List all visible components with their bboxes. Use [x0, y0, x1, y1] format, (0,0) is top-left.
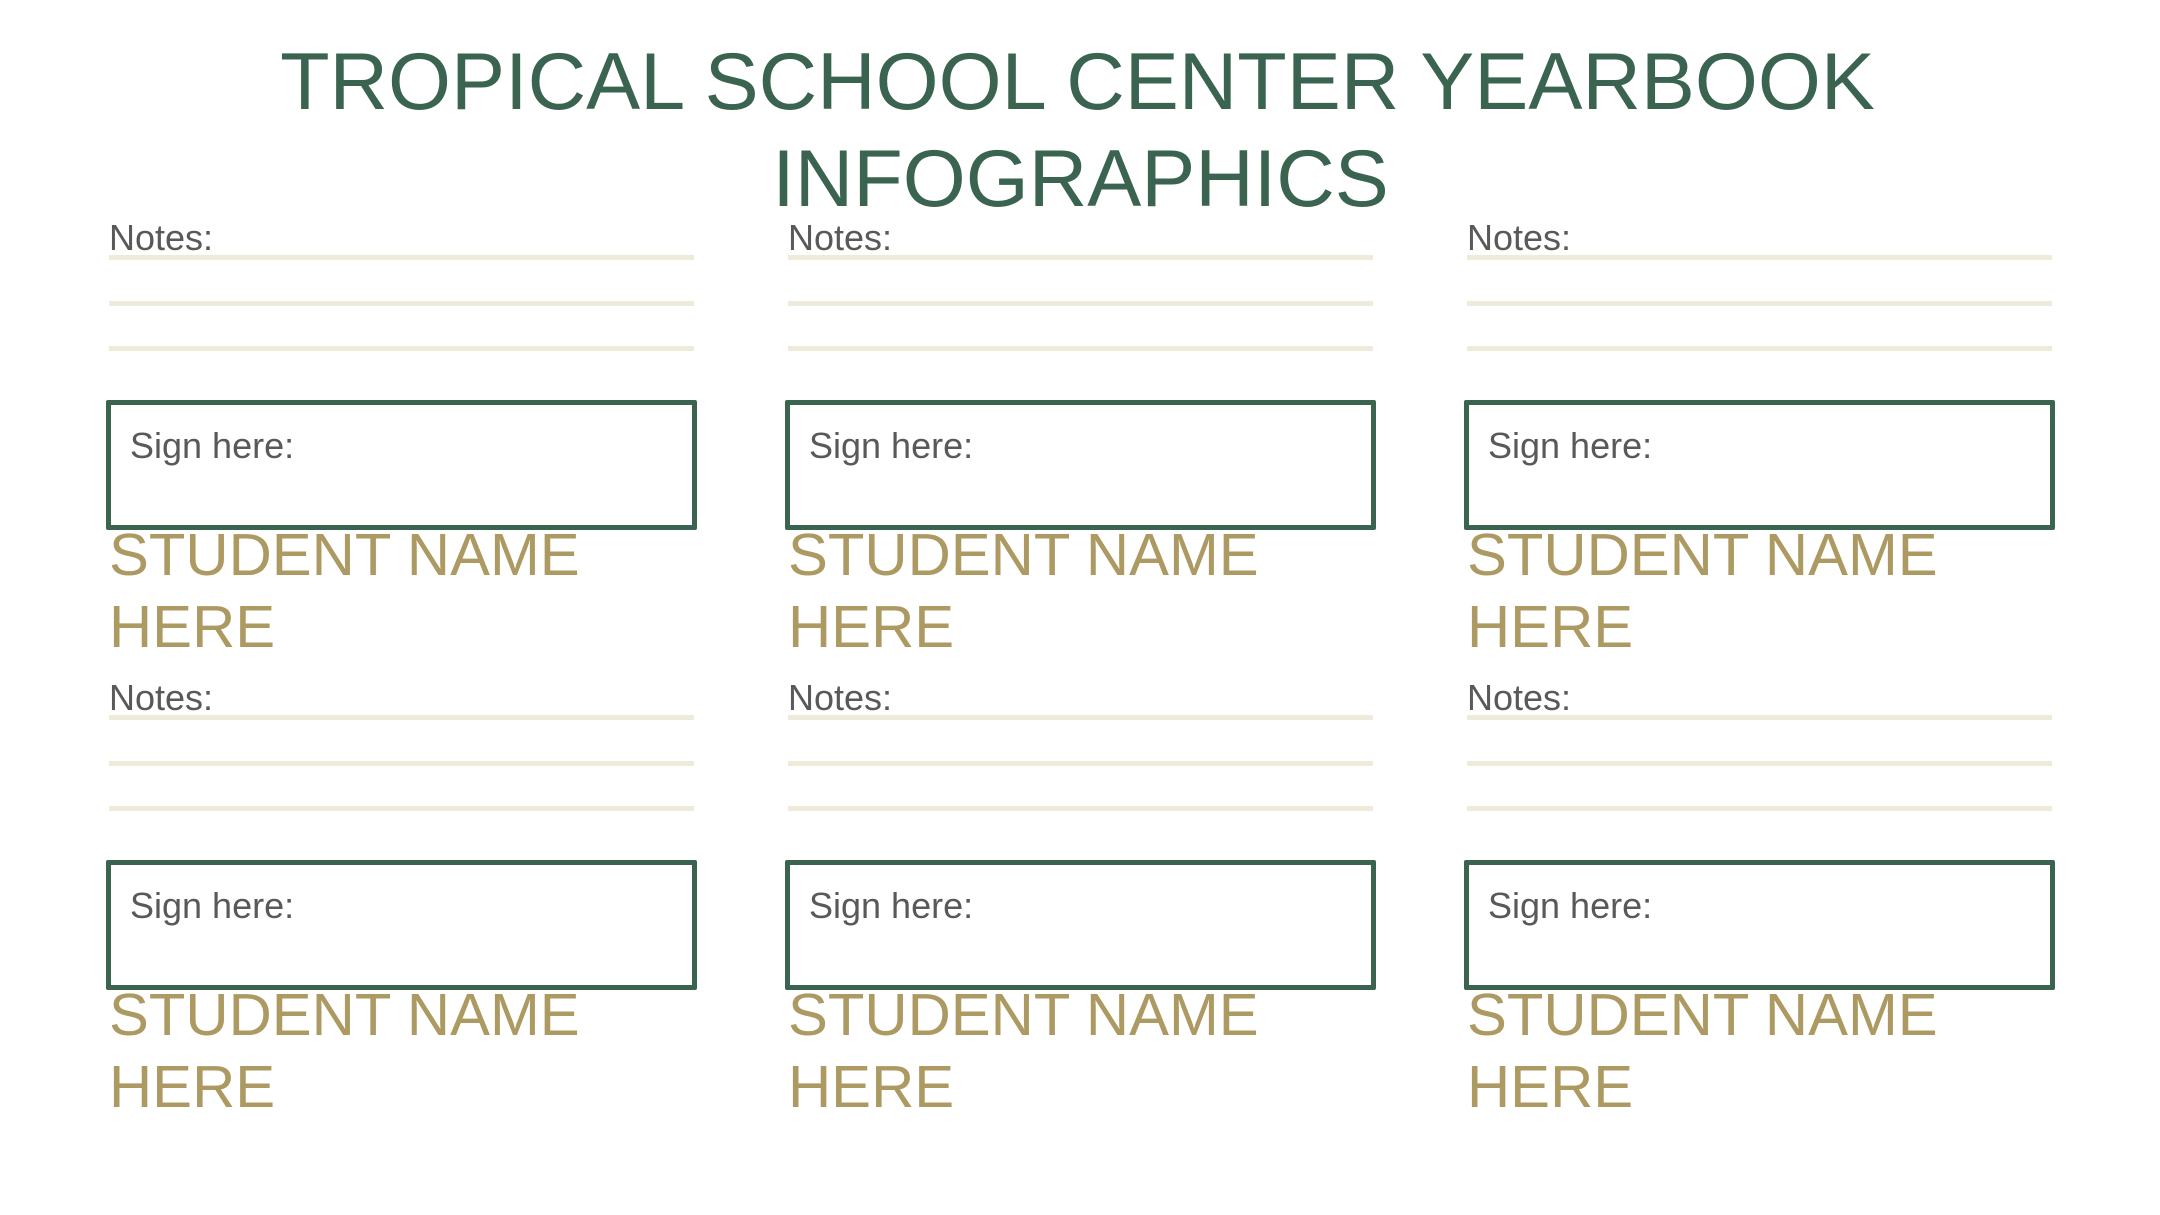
- notes block: Notes:: [788, 217, 892, 258]
- notes block: Notes:: [1467, 217, 1571, 258]
- signature box: [785, 400, 1376, 530]
- title: [280, 37, 1875, 224]
- signature box: [1464, 400, 2055, 530]
- notes block: [1467, 677, 2052, 811]
- notes block: [788, 217, 1373, 351]
- notes block: [1467, 217, 2052, 351]
- signature box: [106, 860, 697, 990]
- signature box: Sign here:: [130, 425, 294, 466]
- notes block: Notes:: [788, 677, 892, 718]
- panel: student card row 2 column 2: [785, 677, 1376, 1120]
- signature box: [106, 400, 697, 530]
- signature box: Sign here:: [809, 425, 973, 466]
- panel: student card row 1 column 3: [1464, 217, 2055, 660]
- signature box: Sign here:: [1488, 425, 1652, 466]
- panel: student card row 2 column 3: [1464, 677, 2055, 1120]
- notes block: Notes:: [1467, 677, 1571, 718]
- notes block: Notes:: [109, 677, 213, 718]
- signature box: Sign here:: [130, 885, 294, 926]
- notes block: [109, 677, 694, 811]
- signature box: Sign here:: [809, 885, 973, 926]
- notes block: [788, 677, 1373, 811]
- title: TROPICAL SCHOOL CENTER YEARBOOK: [280, 37, 1875, 127]
- signature box: Sign here:: [1488, 885, 1652, 926]
- student name: STUDENT NAME HERE: [1467, 981, 1938, 1120]
- panel: student card row 1 column 1: [106, 217, 697, 660]
- title: INFOGRAPHICS: [772, 134, 1389, 224]
- student name: STUDENT NAME HERE: [788, 521, 1259, 660]
- student name: STUDENT NAME HERE: [1467, 521, 1938, 660]
- student name: STUDENT NAME HERE: [109, 981, 580, 1120]
- notes block: [109, 217, 694, 351]
- signature box: [1464, 860, 2055, 990]
- panel: student card row 1 column 2: [785, 217, 1376, 660]
- student name: STUDENT NAME HERE: [109, 521, 580, 660]
- notes block: Notes:: [109, 217, 213, 258]
- signature box: [785, 860, 1376, 990]
- panel: student card row 2 column 1: [106, 677, 697, 1120]
- student name: STUDENT NAME HERE: [788, 981, 1259, 1120]
